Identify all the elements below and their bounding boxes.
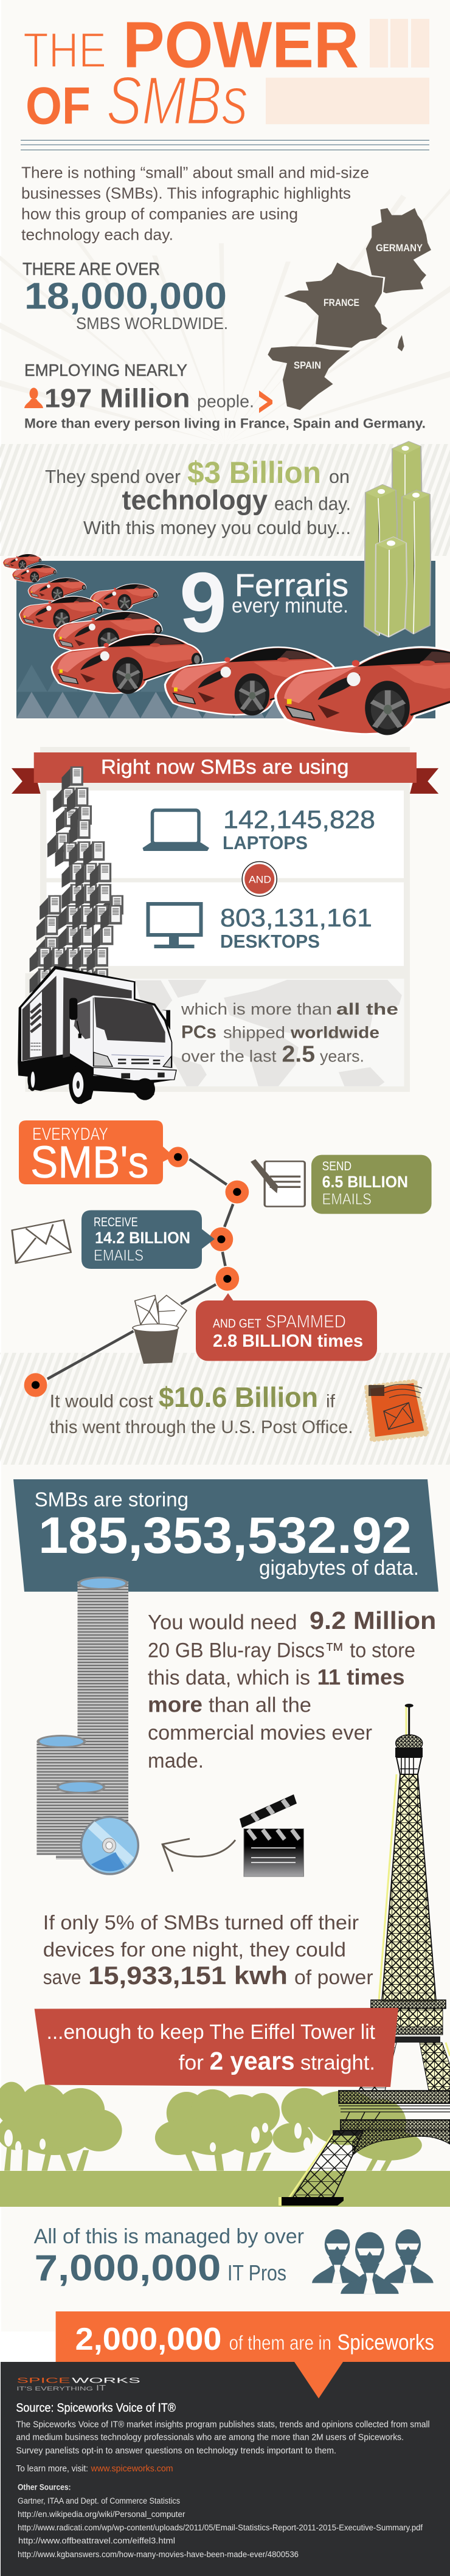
text block: all the PCs shipped: 2.5 (282, 1042, 315, 1068)
panel: Ferraris (3, 442, 450, 735)
logo: Spiceworks: IT'S EVERYTHING (16, 2386, 93, 2392)
banner: keep Eiffel Tower lit (35, 2008, 398, 2087)
icon: IT professionals (312, 2229, 434, 2294)
text block: 9.2 million discs (148, 1606, 436, 1772)
stat: 197 million people: 197 Million (44, 383, 190, 414)
text block: Voice of IT description: and medium business technology professionals who are among the more than 2M users of Spiceworks. (16, 2433, 404, 2443)
banner: keep Eiffel Tower lit: for (179, 2051, 204, 2074)
icon: greater-than sign (259, 391, 272, 413)
text block: $3 billion on technology: $3 Billion (187, 456, 321, 490)
text block: other sources (18, 2482, 423, 2559)
stat: desktops (220, 903, 372, 952)
logo: Spiceworks: SPICE (16, 2376, 71, 2384)
panel: footer sources (1, 2362, 450, 2576)
timeline nodes (24, 1147, 249, 1397)
text block: 7,000,000 IT pros: All of this is managed by over (34, 2225, 304, 2248)
illustration: disc stacks (36, 1577, 128, 1859)
callout: receive 14.2 billion emails: RECEIVE (94, 1215, 138, 1229)
map: Germany, France, Spain (268, 208, 431, 410)
text: 9 Ferraris every minute: 9 (179, 555, 227, 650)
text block: post office cost: It would cost (50, 1392, 153, 1411)
text block: 9.2 million discs: 9.2 Million (310, 1606, 436, 1634)
text block: turning off devices: devices for one night, they could (43, 1939, 346, 1961)
banner: keep Eiffel Tower lit: 2 years (210, 2046, 295, 2075)
text: SMBs are storing: 185,353,532.92 (38, 1507, 412, 1564)
stat: 197 million people: More than every person living in France, Spain and Germany. (24, 416, 426, 431)
stat: laptops (223, 805, 375, 853)
text block: Voice of IT description: Survey panelists opt-in to answer questions on technology trends important to them. (16, 2446, 336, 2456)
heading: OF SMBs (26, 63, 248, 139)
title decorative blocks (266, 19, 429, 124)
label: Everyday SMB's (19, 1120, 174, 1187)
text block: turning off devices: save (43, 1966, 81, 1988)
banner: 2,000,000 in Spiceworks: Spiceworks (338, 2330, 434, 2355)
text block: other sources: http://en.wikipedia.org/wiki/Personal_computer (18, 2510, 185, 2519)
text block: all the PCs shipped: which is more than (181, 1000, 332, 1018)
map: world background (135, 980, 402, 1086)
text block: other sources: http://www.kgbanswers.com/how-many-movies-have-been-made-ever/4800536 (18, 2550, 299, 2559)
back stack (392, 442, 422, 560)
stat: 18,000,000 SMBs worldwide (22, 260, 228, 333)
text block: all the PCs shipped: shipped (223, 1024, 285, 1042)
logo: Spiceworks (16, 2376, 140, 2392)
icon: person (24, 388, 43, 408)
text block: Voice of IT description: www.spiceworks.com (91, 2464, 173, 2474)
icon: envelope (12, 1220, 71, 1263)
text block: all the PCs shipped: years. (320, 1047, 364, 1066)
label: Everyday SMB's: SMB's (30, 1137, 148, 1187)
icon: film clapperboard (240, 1794, 303, 1876)
icon: desktop monitor (148, 904, 201, 948)
banner: 2,000,000 in Spiceworks: of them are in (229, 2331, 331, 2354)
right stack (402, 490, 431, 634)
text block: turning off devices: 15,933,151 kwh (88, 1961, 288, 1990)
text block: 9.2 million discs: commercial movies ever (148, 1721, 372, 1745)
stat: desktops: DESKTOPS (220, 931, 320, 952)
arrow: movies to discs (162, 1839, 235, 1872)
panel: IT pros (34, 2225, 434, 2294)
front stack (375, 537, 407, 637)
text: 9 Ferraris every minute (179, 555, 348, 650)
icon: postage stamp (366, 1381, 428, 1440)
illustration: stacked PCs (30, 766, 123, 993)
text block: introduction (21, 163, 369, 243)
text block: all the PCs shipped: worldwide (290, 1024, 379, 1042)
left stack (364, 485, 397, 636)
timeline connector (47, 1159, 233, 1379)
callout: receive 14.2 billion emails (81, 1210, 215, 1269)
heading: THE POWER: THE (23, 23, 106, 78)
text block: 9.2 million discs: 20 GB Blu-ray Discs™ to store (148, 1639, 415, 1662)
text block: introduction: businesses (SMBs). This infographic highlights (21, 184, 351, 202)
callout: send 6.5 billion emails: SEND (322, 1159, 351, 1173)
text block: 9.2 million discs: than all the (209, 1694, 311, 1717)
text block: other sources: Other Sources: (18, 2482, 71, 2491)
map: Germany, France, Spain: GERMANY (376, 242, 423, 254)
text block: turning off devices (43, 1911, 373, 1990)
icon: blu-ray disc (81, 1817, 138, 1874)
callout: receive 14.2 billion emails: 14.2 BILLION (95, 1229, 190, 1247)
text block: 7,000,000 IT pros (34, 2225, 304, 2288)
logo: Spiceworks: IT (96, 2383, 106, 2392)
text block: introduction: There is nothing “small” about small and mid-size (21, 163, 369, 181)
text block: turning off devices: If only 5% of SMBs turned off their (43, 1911, 359, 1934)
callout: spammed 2.8 billion times: SPAMMED (266, 1311, 346, 1332)
text block: Voice of IT description: The Spiceworks Voice of IT® market insights program publishes stats, trends and opinions collected from small (16, 2420, 430, 2430)
stat: desktops: 803,131,161 (220, 903, 372, 932)
stat: 197 million people: people. (197, 392, 254, 411)
text block: 9.2 million discs: made. (148, 1749, 204, 1772)
illustration: Eiffel Tower (279, 1704, 450, 2206)
text block: all the PCs shipped: all the (336, 1000, 398, 1018)
ribbon: Right now SMBs are using (12, 752, 438, 794)
text: SMBs are storing: SMBs are storing (35, 1488, 189, 1511)
panel: devices in use (12, 747, 438, 1104)
callout: receive 14.2 billion emails: EMAILS (94, 1246, 144, 1264)
illustration: money stacks (364, 442, 431, 637)
label: Everyday SMB's: EVERYDAY (32, 1125, 108, 1144)
stat: laptops: 142,145,828 (223, 805, 375, 834)
text block: 9.2 million discs: this data, which is (148, 1666, 310, 1689)
text block: 9.2 million discs: 11 times (317, 1664, 405, 1689)
text block: post office cost: if (326, 1392, 336, 1411)
stat: 18,000,000 SMBs worldwide: SMBS WORLDWIDE. (76, 314, 228, 333)
text block: post office cost: $10.6 Billion (159, 1381, 318, 1413)
icon: laptop (142, 810, 209, 851)
illustration: truck (18, 966, 176, 1104)
heading: THE POWER: POWER (123, 8, 359, 82)
text block: Voice of IT description: To learn more, visit: (16, 2464, 88, 2474)
text block: Voice of IT description (16, 2420, 430, 2474)
heading: OF SMBs: SMBs (106, 63, 248, 139)
stat: laptops: LAPTOPS (223, 832, 308, 853)
text block: $3 billion on technology: They spend over (45, 466, 181, 487)
panel: title block (21, 8, 429, 150)
ribbon: Right now SMBs are using: Right now SMBs are using (101, 755, 349, 778)
stat: 197 million people (24, 361, 426, 431)
banner: keep Eiffel Tower lit: straight. (300, 2051, 375, 2074)
text block: $3 billion on technology: each day. (274, 493, 351, 515)
stat: 18,000,000 SMBs worldwide: 18,000,000 (24, 275, 227, 316)
banner: 2,000,000 in Spiceworks (56, 2311, 450, 2362)
callout: send 6.5 billion emails (311, 1155, 432, 1214)
text block: $3 billion on technology: technology (122, 484, 268, 516)
panel: everyday SMBs email timeline (0, 1120, 450, 1465)
text block: $3 billion on technology: With this money you could buy... (83, 517, 351, 538)
text block: other sources: Gartner, ITAA and Dept. of Commerce Statistics (18, 2496, 180, 2505)
text block: all the PCs shipped: PCs (181, 1022, 216, 1043)
text: 9 Ferraris every minute: Ferraris (235, 568, 348, 603)
heading: OF SMBs: OF (26, 77, 91, 135)
panel: technology spend (0, 444, 450, 556)
panel: Eiffel Tower power saving (0, 1704, 450, 2207)
banner: keep Eiffel Tower lit: ...enough to keep The Eiffel Tower lit (46, 2021, 376, 2044)
stat: 197 million people: EMPLOYING NEARLY (24, 361, 187, 380)
text block: 7,000,000 IT pros: 7,000,000 (35, 2248, 221, 2288)
illustration: red Ferraris (3, 554, 450, 735)
banner: 2,000,000 in Spiceworks: 2,000,000 (75, 2322, 221, 2357)
stat: 18,000,000 SMBs worldwide: THERE ARE OVER (22, 260, 160, 279)
heading: source: Source: Spiceworks Voice of IT® (16, 2401, 176, 2415)
text block: 7,000,000 IT pros: IT Pros (227, 2260, 286, 2285)
text: 9 Ferraris every minute: every minute. (232, 594, 348, 617)
pointer: orange triangle (294, 2362, 343, 2398)
text: SMBs are storing (35, 1488, 419, 1580)
text block: turning off devices: of power (294, 1966, 373, 1988)
text block: introduction: how this group of companies are using (21, 204, 298, 223)
text: SMBs are storing: gigabytes of data. (259, 1557, 419, 1580)
map: Germany, France, Spain: FRANCE (324, 297, 359, 308)
text block: 9.2 million discs: more (148, 1692, 202, 1717)
panel: data storage (13, 1479, 438, 1876)
logo: Spiceworks: WORKS (72, 2376, 140, 2384)
map: Germany, France, Spain: SPAIN (294, 359, 321, 371)
badge: AND: AND (249, 873, 271, 886)
text block: post office cost (50, 1381, 353, 1437)
text block: all the PCs shipped (181, 1000, 398, 1068)
illustration: trees and lawn (0, 2082, 450, 2207)
text block: introduction: technology each day. (21, 225, 173, 243)
callout: send 6.5 billion emails: 6.5 BILLION (322, 1173, 408, 1191)
callout: spammed 2.8 billion times: AND GET (213, 1318, 261, 1331)
text block: $3 billion on technology: on (329, 466, 350, 487)
text block: other sources: http://www.radicati.com/wp/wp-content/uploads/2011/05/Email-Statistics-Report-2011-2015-Executive-Summary.pdf (18, 2523, 423, 2532)
text block: $3 billion on technology (45, 456, 351, 538)
text block: other sources: http://www.offbeattravel.com/eiffel3.html (18, 2536, 175, 2546)
text block: 9.2 million discs: You would need (148, 1611, 297, 1634)
callout: spammed 2.8 billion times: 2.8 BILLION times (213, 1331, 363, 1351)
icon: notepad and pencil (251, 1159, 305, 1207)
text block: post office cost: this went through the U.S. Post Office. (50, 1417, 353, 1437)
text block: all the PCs shipped: over the last (181, 1047, 277, 1066)
heading: THE POWER (23, 8, 359, 82)
badge: AND (242, 861, 277, 897)
icon: trash bin with envelopes (133, 1296, 187, 1364)
callout: spammed 2.8 billion times (196, 1293, 377, 1361)
callout: send 6.5 billion emails: EMAILS (322, 1190, 372, 1208)
